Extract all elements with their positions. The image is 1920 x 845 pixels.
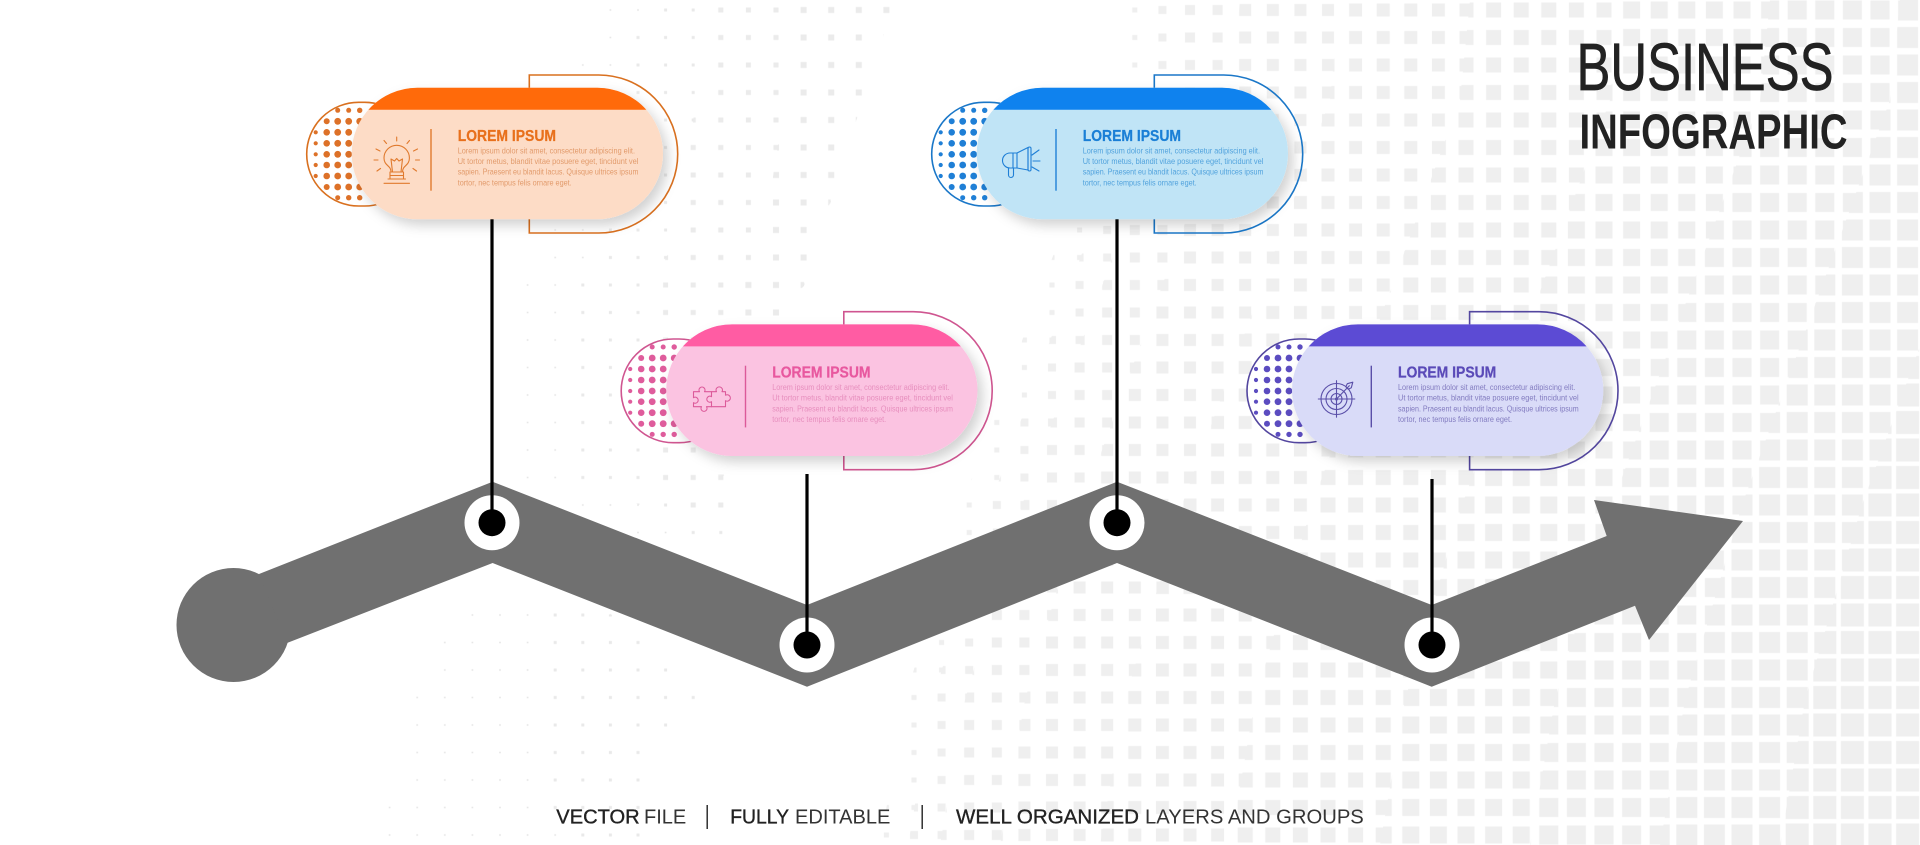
icon: target [1318,381,1355,417]
divider [745,366,746,427]
footer strapline: EDITABLE [795,806,890,828]
title [1576,30,1848,160]
pink outline bracket [844,312,992,470]
body text [772,382,953,424]
body text: Ut tortor metus, blandit vitae posuere eget, tincidunt vel [1398,393,1579,403]
body text: Lorem ipsum dolor sit amet, consectetur adipiscing elit. [458,145,635,155]
divider [1055,129,1057,191]
panel: purple target card [1247,312,1618,470]
node marker 4 [1404,479,1460,672]
footer strapline: FILE [644,806,686,828]
body text: Lorem ipsum dolor sit amet, consectetur adipiscing elit. [772,382,950,392]
title: INFOGRAPHIC [1580,106,1848,160]
body text: sapien. Praesent eu blandit lacus. Quisque ultrices ipsum [1083,167,1263,177]
purple dotted semicircle [1247,339,1357,443]
panel: pink puzzle card [621,312,992,470]
panel: blue megaphone card [932,75,1303,233]
pink dotted semicircle [621,339,731,443]
node marker 1 [464,219,520,550]
orange top band [368,88,646,110]
icon: puzzle [694,387,730,411]
body text: tortor, nec tempus felis ornare eget. [772,414,886,424]
icon: light bulb [374,137,420,183]
body text: Ut tortor metus, blandit vitae posuere eget, tincidunt vel [458,156,638,166]
body text: sapien. Praesent eu blandit lacus. Quisque ultrices ipsum [772,403,953,413]
heading: LOREM IPSUM [1083,128,1181,145]
pink top band [683,324,961,346]
divider [1371,366,1372,427]
orange dotted semicircle [307,102,417,206]
purple pill body [1292,324,1603,456]
node marker 3 [1090,219,1144,550]
blue top band [993,88,1271,110]
panel: orange idea card [307,75,678,233]
body text: Ut tortor metus, blandit vitae posuere eget, tincidunt vel [1083,156,1263,166]
purple top band [1309,324,1587,346]
body text: Lorem ipsum dolor sit amet, consectetur adipiscing elit. [1083,145,1260,155]
footer strapline: WELL ORGANIZED [956,806,1139,828]
blue outline bracket [1154,75,1303,233]
purple outline bracket [1470,312,1618,470]
pink pill body [666,324,978,456]
node marker 2 [780,474,834,672]
body text [1083,145,1263,187]
body text: sapien. Praesent eu blandit lacus. Quisque ultrices ipsum [458,167,638,177]
body text: sapien. Praesent eu blandit lacus. Quisque ultrices ipsum [1398,403,1579,413]
footer strapline: VECTOR [556,806,640,828]
heading: LOREM IPSUM [458,128,556,145]
title: BUSINESS [1576,30,1834,105]
divider [430,129,432,191]
body text: tortor, nec tempus felis ornare eget. [1083,177,1197,187]
heading: LOREM IPSUM [772,365,870,382]
icon: megaphone [1002,147,1040,178]
zigzag arrow [176,482,1743,687]
orange pill body [352,88,663,219]
body text [1398,382,1579,424]
orange outline bracket [529,75,678,233]
body text: Ut tortor metus, blandit vitae posuere eget, tincidunt vel [772,393,953,403]
blue dotted semicircle [932,102,1042,206]
footer strapline [556,805,1364,829]
footer strapline: LAYERS AND GROUPS [1145,806,1364,828]
body text [458,145,638,187]
body text: tortor, nec tempus felis ornare eget. [1398,414,1512,424]
body text: tortor, nec tempus felis ornare eget. [458,177,572,187]
heading: LOREM IPSUM [1398,365,1496,382]
blue pill body [977,88,1288,219]
footer strapline: FULLY [730,806,789,828]
body text: Lorem ipsum dolor sit amet, consectetur adipiscing elit. [1398,382,1575,392]
